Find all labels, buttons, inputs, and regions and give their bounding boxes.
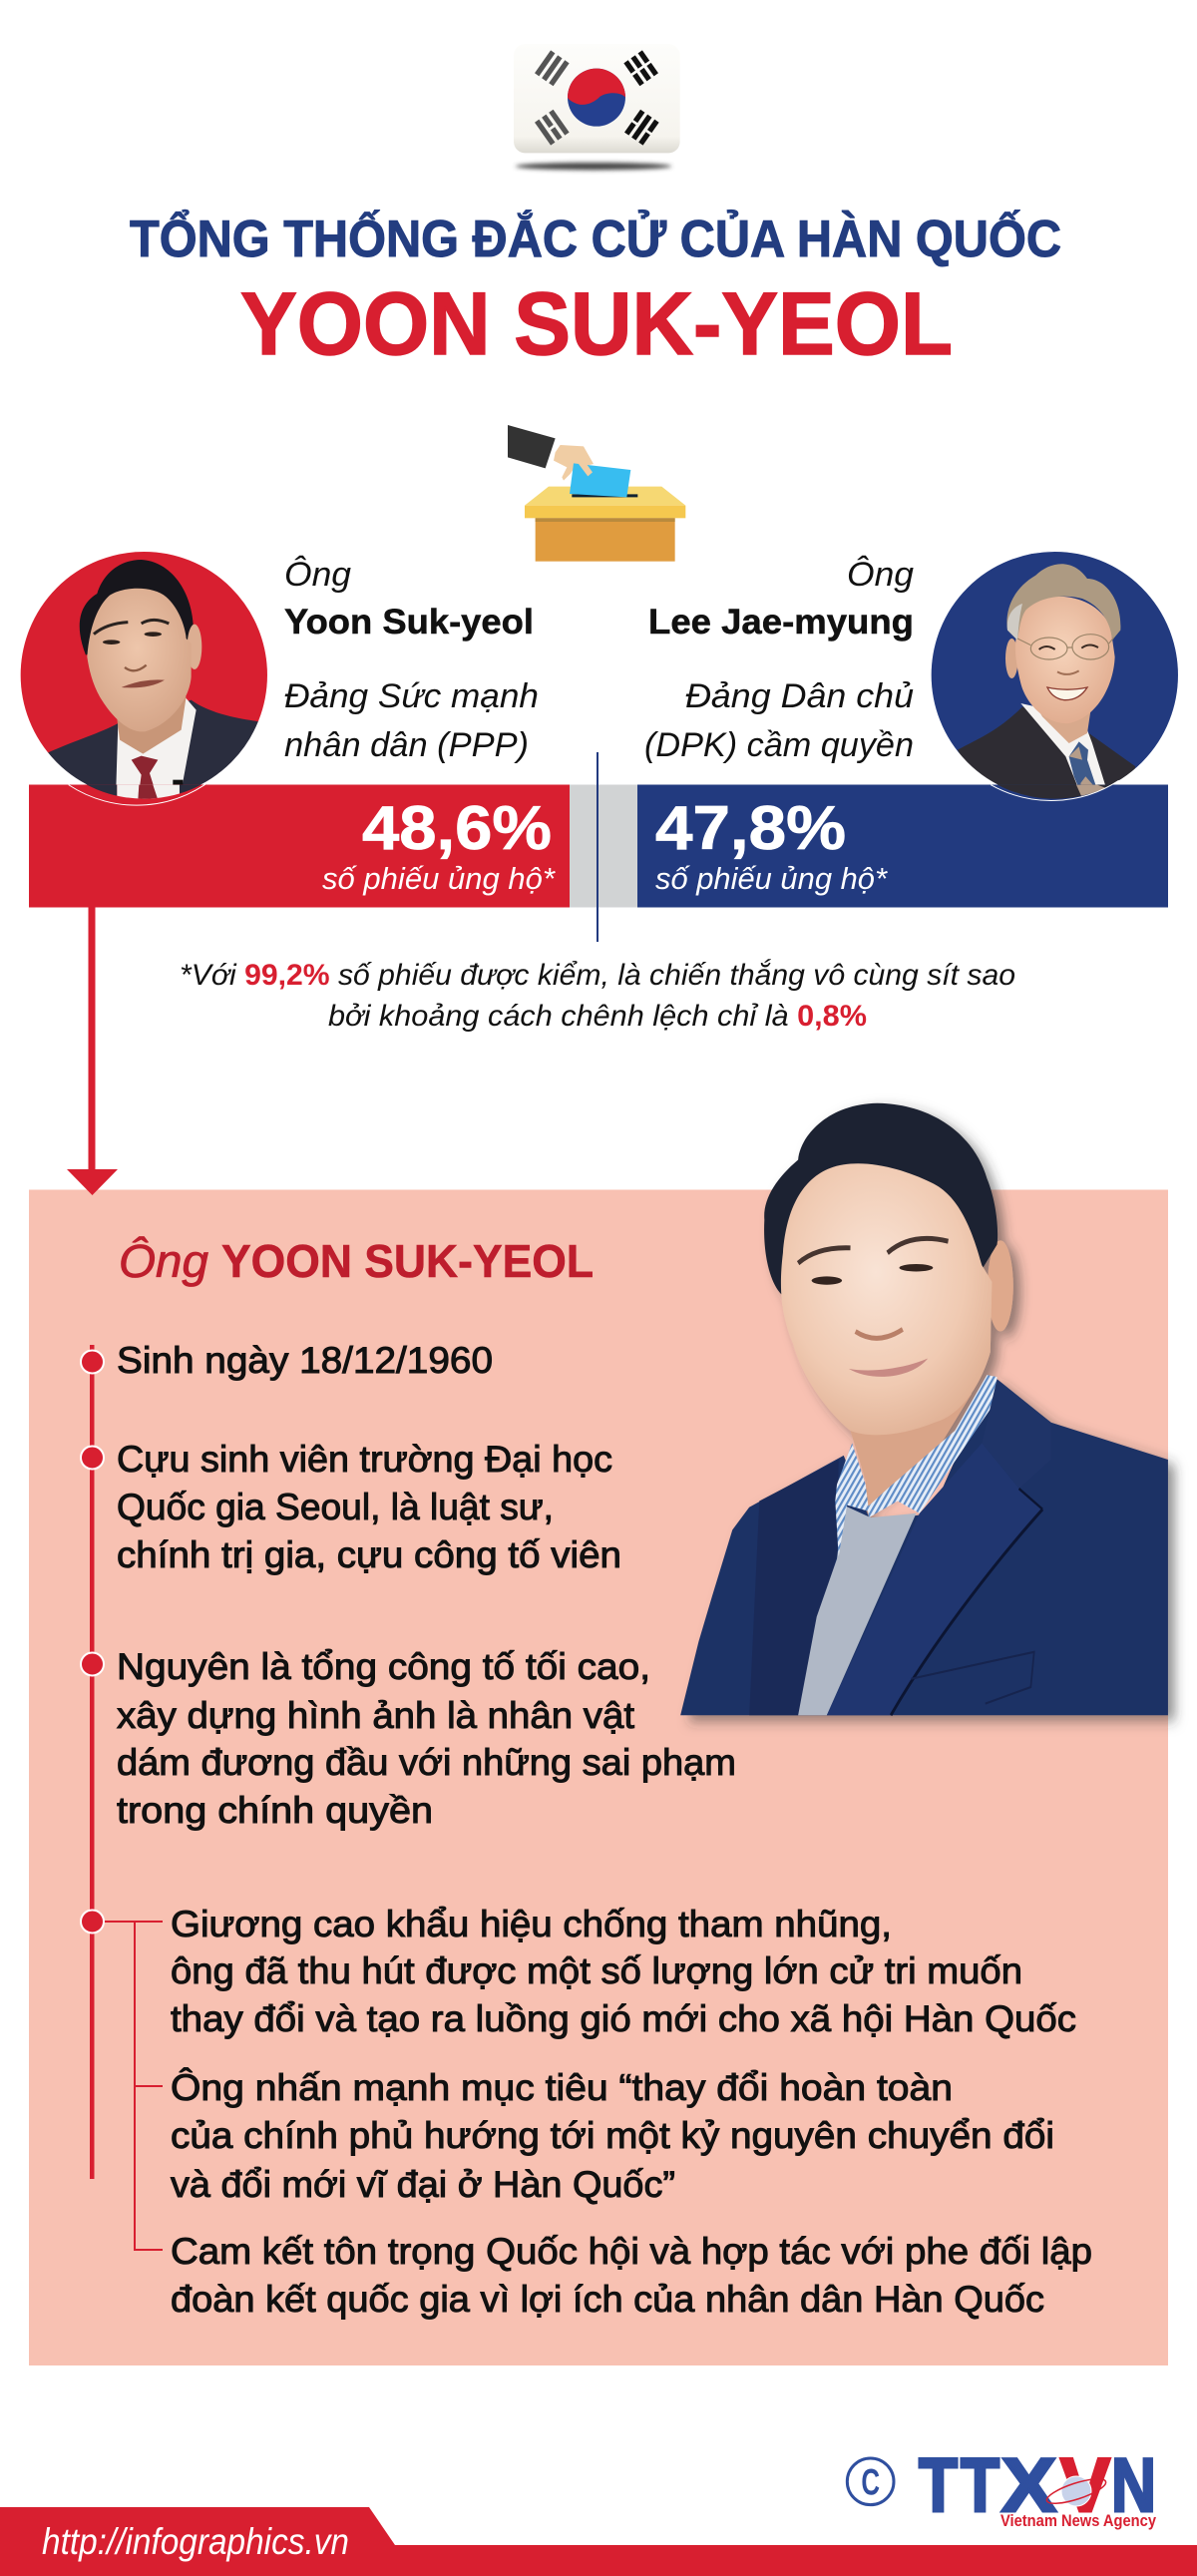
- timeline: [81, 1345, 163, 2250]
- title: YOON SUK-YEOL: [240, 273, 953, 373]
- text: education: chính trị gia, cựu công tố viên: [117, 1534, 621, 1575]
- text: education: [117, 1439, 621, 1575]
- text: prosecutor career: Nguyên là tổng công tố tối cao,: [117, 1646, 650, 1687]
- candidate text: Lee: Lee Jae-myung: [648, 603, 914, 642]
- bar: Lee share: [637, 784, 1168, 908]
- text: anti-corruption slogan: [171, 1904, 1076, 2039]
- portrait: Lee Jae-myung in blue circle: [931, 552, 1178, 810]
- text: prosecutor career: [117, 1646, 736, 1831]
- footnote: *Với 99,2% số phiếu được kiểm, là chiến thắng vô cùng sít sao: [180, 959, 1015, 992]
- text: government goal: Ông nhấn mạnh mục tiêu “thay đổi hoàn toàn: [171, 2067, 953, 2108]
- vote figures: Lee: số phiếu ủng hộ*: [655, 861, 888, 896]
- vote figures: Lee: 47,8%: [655, 794, 846, 863]
- logo: TTXVN: [919, 2443, 1156, 2530]
- text: government goal: [171, 2067, 1054, 2205]
- logo: TTXVN: T: [919, 2443, 958, 2528]
- candidate text: Yoon: Ông: [284, 556, 351, 594]
- icon: South Korea flag: [514, 44, 680, 170]
- logo: TTXVN: X: [1001, 2443, 1056, 2528]
- portrait: Yoon Suk-yeol in red circle: [20, 552, 267, 810]
- portrait overlap on blue bar: [991, 780, 1119, 801]
- logo: TTXVN: N: [1111, 2443, 1156, 2528]
- logo: TTXVN: Vietnam News Agency: [1000, 2511, 1156, 2530]
- footer band: [0, 2507, 1197, 2576]
- text: commitment: Cam kết tôn trọng Quốc hội và hợp tác với phe đối lập: [171, 2231, 1092, 2272]
- footer url: http://infographics.vn: [42, 2521, 349, 2562]
- text: birth date: Sinh ngày 18/12/1960: [117, 1340, 493, 1381]
- text: commitment: đoàn kết quốc gia vì lợi ích của nhân dân Hàn Quốc: [171, 2279, 1044, 2320]
- vote figures: Yoon: [322, 794, 556, 896]
- heading: biography: YOON SUK-YEOL: [221, 1235, 594, 1287]
- bar: Yoon share: [29, 784, 570, 908]
- footnote: [180, 959, 1015, 1033]
- text: government goal: và đổi mới vĩ đại ở Hàn Quốc”: [171, 2164, 675, 2205]
- vote figures: Lee: [655, 794, 888, 896]
- text: commitment: [171, 2231, 1092, 2320]
- text: anti-corruption slogan: ông đã thu hút được một số lượng lớn cử tri muốn: [171, 1950, 1022, 1991]
- candidate text: Lee: (DPK) cầm quyền: [644, 726, 914, 764]
- text: education: Cựu sinh viên trường Đại học: [117, 1439, 612, 1480]
- candidate text: Yoon: Yoon Suk-yeol: [284, 603, 534, 642]
- icon: ballot box: [508, 425, 685, 562]
- vote figures: Yoon: số phiếu ủng hộ*: [322, 861, 556, 896]
- text: prosecutor career: trong chính quyền: [117, 1790, 433, 1831]
- candidate text: Yoon: [284, 556, 539, 764]
- logo: TTXVN: V: [1060, 2443, 1110, 2528]
- candidate text: Yoon: nhân dân (PPP): [284, 726, 529, 764]
- text: prosecutor career: dám đương đầu với những sai phạm: [117, 1742, 736, 1783]
- text: government goal: của chính phủ hướng tới một kỷ nguyên chuyển đổi: [171, 2115, 1054, 2156]
- panel: biography: [29, 1189, 1168, 2365]
- logo: TTXVN: T: [961, 2443, 999, 2528]
- candidate text: Lee: [644, 556, 914, 764]
- vote bars: [29, 784, 1168, 908]
- portrait: Yoon Suk-yeol large: [680, 1103, 1168, 1715]
- text: anti-corruption slogan: Giương cao khẩu hiệu chống tham nhũng,: [171, 1904, 892, 1944]
- logo: copyright mark: C: [861, 2461, 880, 2503]
- footnote: bởi khoảng cách chênh lệch chỉ là 0,8%: [328, 1000, 867, 1033]
- text: prosecutor career: xây dựng hình ảnh là nhân vật: [117, 1695, 635, 1736]
- heading: biography: Ông: [119, 1235, 208, 1287]
- candidate text: Yoon: Đảng Sức mạnh: [284, 677, 539, 715]
- portrait overlap on red bar: [69, 773, 220, 805]
- title: [130, 210, 1061, 373]
- candidate text: Lee: Đảng Dân chủ: [685, 677, 914, 715]
- centre divider: [597, 752, 598, 942]
- text: anti-corruption slogan: thay đổi và tạo ra luồng gió mới cho xã hội Hàn Quốc: [171, 1998, 1076, 2039]
- candidate text: Lee: Ông: [847, 556, 914, 594]
- title: TỔNG THỐNG ĐẮC CỬ CỦA HÀN QUỐC: [130, 210, 1061, 268]
- text: education: Quốc gia Seoul, là luật sư,: [117, 1487, 554, 1527]
- logo: copyright mark: [847, 2458, 894, 2505]
- arrow: from Yoon bar to biography: [67, 907, 118, 1195]
- vote figures: Yoon: 48,6%: [362, 794, 552, 863]
